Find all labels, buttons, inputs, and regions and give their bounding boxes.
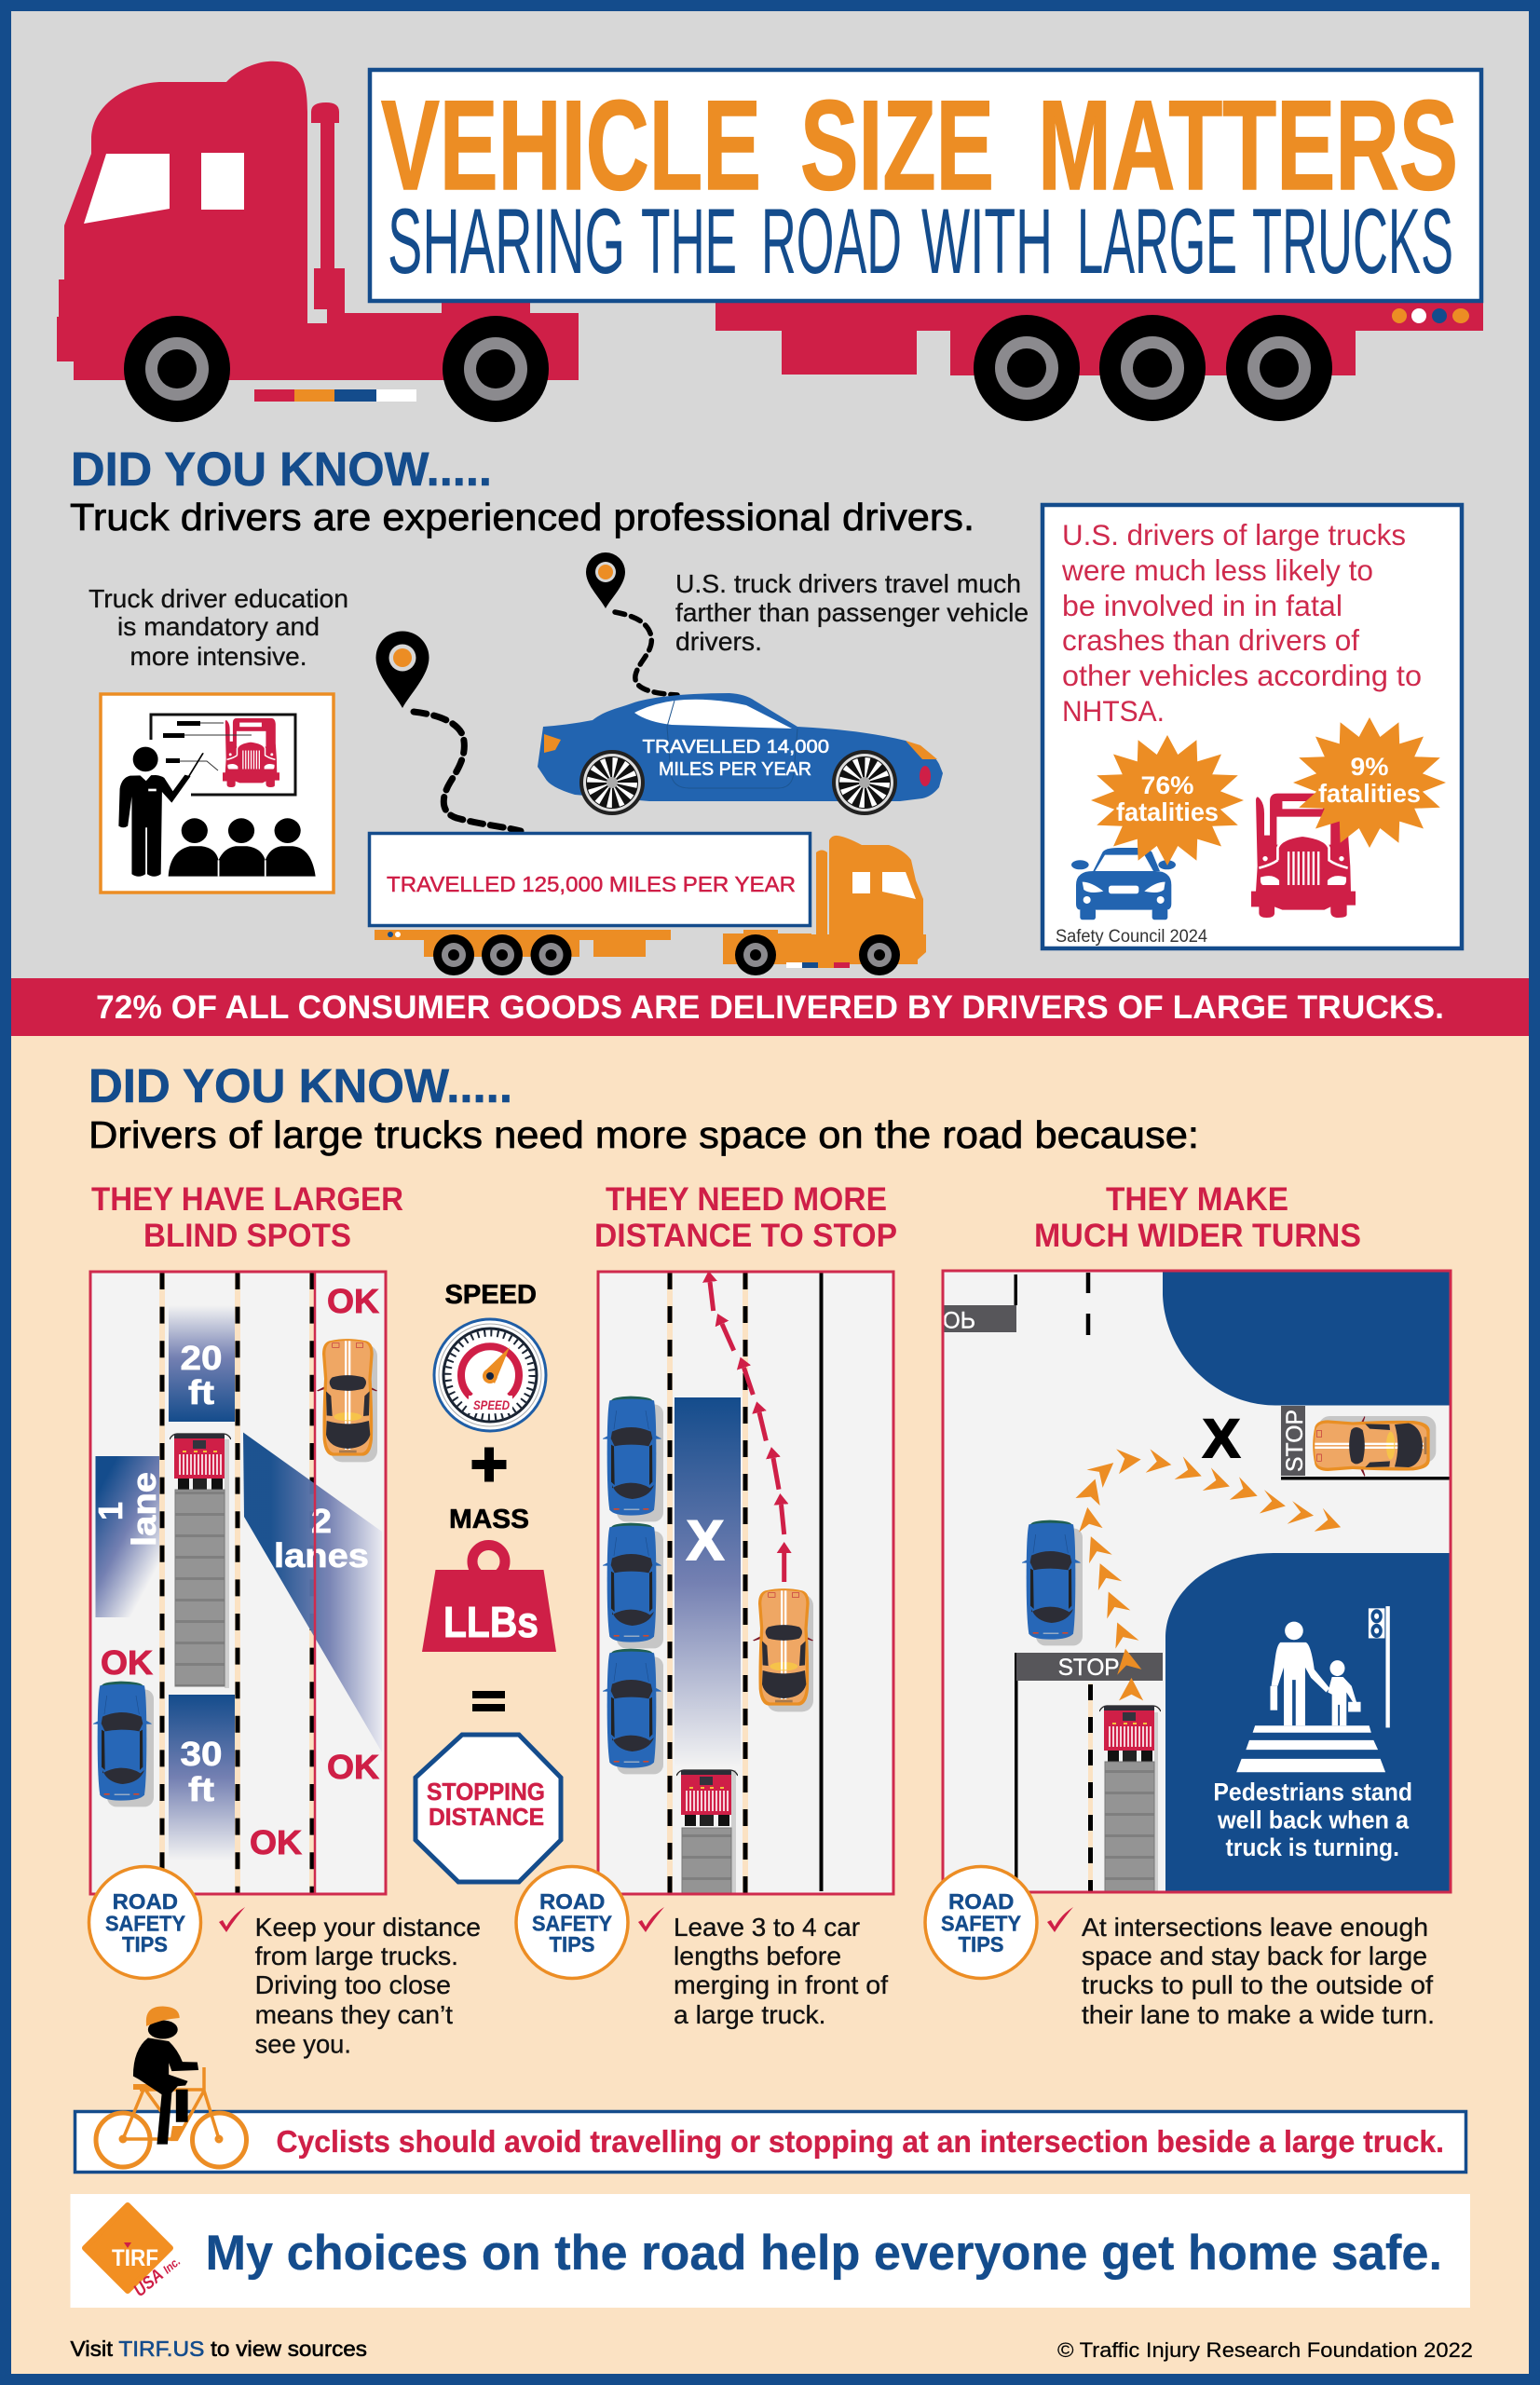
wheels: [124, 315, 1332, 422]
heading: stopping distance: [594, 1181, 897, 1254]
block: bottom right: [1165, 1553, 1451, 1892]
bottom centre dashes: [1088, 1683, 1093, 1892]
text: fatal crash statement: were much less likely to: [1061, 553, 1373, 587]
top left lane and flipped stop bar: STOP: [914, 1306, 975, 1332]
lane markings: [670, 1272, 822, 1894]
blind spot: rear 30 ft: 30: [181, 1735, 222, 1773]
orange car: [753, 1588, 813, 1711]
icon: location pin and route to truck: [376, 631, 521, 831]
icon: red truck front: [1251, 794, 1356, 918]
blind spot: rear 30 ft: ft: [188, 1770, 214, 1808]
car mileage label: [643, 736, 829, 780]
bottom left lane and stop bar: STOP: [1058, 1655, 1120, 1681]
source note: Safety Council 2024: [1056, 927, 1207, 947]
text: fatal crash statement: crashes than drivers of: [1062, 623, 1359, 657]
blind spot: front 20 ft: 20: [181, 1339, 222, 1377]
starburst: 9 percent: fatalities: [1318, 779, 1421, 808]
speed plus mass equation: [416, 1280, 561, 1882]
check mark 3: [1047, 1907, 1073, 1932]
starburst: 76 percent: [1091, 735, 1244, 865]
equals sign: [472, 1691, 505, 1711]
orange trailer chassis: [375, 930, 671, 957]
tip text 1: from large trucks.: [255, 1942, 458, 1970]
panel: stopping distance road diagram: [598, 1272, 893, 1894]
X no-go mark: X: [1203, 1409, 1240, 1469]
label: speed: SPEED: [445, 1280, 537, 1310]
tip text 1: Keep your distance: [255, 1913, 481, 1942]
footer: sources: Visit TIRF.US to view sources: [71, 2337, 367, 2361]
merging path arrows: [710, 1282, 784, 1582]
background: beige lower section: [0, 978, 1540, 2385]
text: driver education: more intensive.: [130, 642, 307, 671]
subheading: experienced professional drivers: Truck drivers are experienced professional drivers.: [70, 496, 974, 538]
tip text 1: see you.: [255, 2029, 351, 2059]
subtitle: [388, 189, 1453, 293]
rider: [133, 2007, 198, 2145]
heading: blind spots: THEY HAVE LARGER: [91, 1181, 403, 1218]
top left lane and flipped stop bar: [914, 1274, 1017, 1332]
text: fatal crash statement: U.S. drivers of large trucks: [1062, 518, 1406, 552]
badge: road safety tips 3: [925, 1867, 1037, 1979]
heading: did you know 1: DID YOU KNOW.....: [71, 443, 492, 496]
icon: speedometer: SPEED: [473, 1397, 510, 1412]
starburst: 9 percent: 9%: [1351, 753, 1388, 781]
tip text 2: [674, 1913, 888, 2029]
badge: road safety tips 1: TIPS: [122, 1932, 168, 1956]
icon: weight: LLBs: [443, 1598, 538, 1646]
stopping zone: X: [687, 1509, 724, 1572]
illustration: orange truck with mileage: [369, 833, 926, 975]
icon: weight: [422, 1545, 556, 1652]
panel: blind spots road diagram: [90, 1272, 386, 1894]
blue car: [93, 1682, 154, 1806]
badge: road safety tips 3: SAFETY: [941, 1912, 1021, 1936]
text: fatal crash statement: [1061, 518, 1422, 728]
OK labels: OK: [101, 1643, 153, 1682]
text: truck drivers travel farther: drivers.: [675, 627, 762, 656]
red band: 72% OF ALL CONSUMER GOODS ARE DELIVERED BY DRIVERS OF LARGE TRUCKS.: [96, 989, 1444, 1026]
pedestrians at crossing: [1236, 1606, 1390, 1772]
board labels: [163, 721, 252, 770]
subtitle: LARGE: [1077, 189, 1237, 293]
blind spot: front 20 ft: ft: [188, 1373, 214, 1411]
tip text 3: space and stay back for large: [1082, 1942, 1427, 1970]
label: mass: MASS: [449, 1505, 529, 1534]
blind spot: right 2 lanes: [243, 1433, 382, 1752]
OK labels: [101, 1282, 379, 1861]
icon: speedometer: [434, 1319, 546, 1431]
cab window large: [84, 154, 170, 224]
text: fatal crash statement: be involved in in fatal: [1062, 589, 1342, 622]
turning path arrows: [1075, 1449, 1341, 1700]
text: truck drivers travel farther: U.S. truck drivers travel much: [675, 569, 1021, 598]
text: truck drivers travel farther: farther than passenger vehicle: [675, 598, 1029, 627]
right stop bar: [1281, 1406, 1450, 1479]
orange car: [1313, 1416, 1436, 1477]
truck top view: [676, 1770, 738, 1894]
cyclist callout box: [75, 2111, 1466, 2173]
orange car: [317, 1339, 377, 1462]
stop sign: DISTANCE: [429, 1803, 544, 1831]
illustration: red semi truck header: [57, 61, 1483, 422]
logo: TIRF diamond: USA Inc.: [130, 2251, 184, 2301]
tip text 3: At intersections leave enough: [1082, 1913, 1428, 1942]
heading: did you know 2: DID YOU KNOW.....: [89, 1059, 512, 1112]
starburst: 76 percent: fatalities: [1116, 797, 1219, 826]
colour strip: [254, 389, 416, 402]
car wheels: [579, 750, 897, 815]
heading: blind spots: BLIND SPOTS: [143, 1218, 351, 1254]
heading: stopping distance: DISTANCE TO STOP: [594, 1218, 897, 1254]
check mark 1: [219, 1907, 245, 1932]
cyclist callout box: Cyclists should avoid travelling or stopping at an intersection beside a large truck.: [276, 2124, 1444, 2159]
starburst: 9 percent: [1293, 717, 1446, 848]
title: [381, 75, 1458, 217]
badge: road safety tips 3: ROAD: [948, 1889, 1014, 1914]
orange truck strip and lights: [388, 932, 850, 968]
subheading: need more space: Drivers of large trucks need more space on the road because:: [89, 1113, 1199, 1156]
icon: blue car front: [1071, 848, 1176, 920]
subtitle: SHARING: [388, 189, 625, 293]
blind spot: left 1 lane: [91, 1456, 163, 1617]
title panel on trailer: [370, 70, 1481, 301]
logo: TIRF diamond: [85, 2205, 184, 2301]
tip text 2: merging in front of: [674, 1970, 888, 1999]
panel: wide turn intersection: [914, 1271, 1451, 1892]
OK labels: OK: [327, 1748, 379, 1786]
blind spot: left 1 lane: lane: [125, 1472, 163, 1547]
tip text 2: lengths before: [674, 1942, 841, 1970]
heading: wider turns: MUCH WIDER TURNS: [1034, 1218, 1361, 1254]
panel: NHTSA fatalities: [1043, 505, 1462, 948]
text: pedestrians stand back: well back when a: [1217, 1806, 1410, 1833]
icon: cyclist: [96, 2007, 246, 2167]
OK labels: OK: [250, 1823, 302, 1861]
subtitle: WITH: [921, 189, 1053, 293]
blind spot: rear 30 ft: [169, 1695, 235, 1860]
tip text 3: their lane to make a wide turn.: [1082, 2000, 1435, 2029]
orange truck wheels: [433, 934, 900, 975]
stop sign: STOPPING: [427, 1778, 545, 1806]
stop sign: [416, 1735, 561, 1882]
plus sign: [471, 1448, 507, 1481]
tip text 1: [255, 1913, 481, 2059]
heading: stopping distance: THEY NEED MORE: [606, 1181, 887, 1218]
badge: road safety tips 2: TIPS: [550, 1932, 594, 1956]
tip text 1: means they can’t: [255, 2000, 453, 2029]
bicycle: [96, 2067, 246, 2167]
text: pedestrians stand back: [1213, 1778, 1412, 1861]
truck top view: [170, 1434, 231, 1688]
bottom left lane and stop bar: [1015, 1653, 1163, 1892]
tip text 3: trucks to pull to the outside of: [1082, 1970, 1433, 1999]
title: VEHICLE: [381, 75, 761, 217]
white trailer box: [369, 833, 811, 926]
badge: road safety tips 3: TIPS: [958, 1932, 1004, 1956]
text: pedestrians stand back: Pedestrians stand: [1213, 1778, 1412, 1806]
heading: wider turns: THEY MAKE: [1106, 1181, 1288, 1218]
icon: board: [151, 715, 295, 795]
heading: wider turns: [1034, 1181, 1361, 1254]
car mileage label: MILES PER YEAR: [659, 758, 811, 780]
blue car: [1022, 1520, 1083, 1645]
icon: presenter and students: [118, 747, 316, 877]
blind spot: left 1 lane: 1: [91, 1502, 129, 1520]
blue cars: [603, 1397, 663, 1774]
icon: small truck on board: [223, 718, 279, 787]
banner: slogan: [71, 2194, 1470, 2308]
truck mileage label: TRAVELLED 125,000 MILES PER YEAR: [387, 872, 796, 896]
top centre dashes: [1086, 1273, 1090, 1335]
subtitle: ROAD: [761, 189, 902, 293]
text: fatal crash statement: NHTSA.: [1062, 694, 1165, 728]
lane markings: [162, 1272, 312, 1894]
tip text 2: a large truck.: [674, 2000, 825, 2029]
right stop bar: STOP: [1282, 1410, 1308, 1472]
red cab and tractor frame: [57, 61, 579, 380]
tip text 3: [1082, 1913, 1435, 2029]
orange cab windows: [852, 872, 916, 899]
tip text 1: Driving too close: [255, 1970, 451, 1999]
panel: classroom icon: [101, 694, 334, 893]
truck top view: [1099, 1706, 1161, 1892]
badge: road safety tips 1: SAFETY: [105, 1912, 185, 1936]
text: truck drivers travel farther: [675, 569, 1029, 656]
text: pedestrians stand back: truck is turning.: [1226, 1833, 1399, 1861]
cab window small: [201, 153, 244, 210]
icon: location pin and route to car: [586, 552, 677, 695]
text: driver education: [89, 584, 348, 671]
illustration: blue car with mileage: [538, 693, 943, 815]
slogan text: My choices on the road help everyone get home safe.: [205, 2226, 1442, 2281]
text: fatal crash statement: other vehicles according to: [1062, 659, 1422, 692]
starburst: 76 percent: 76%: [1140, 771, 1194, 799]
blind spot: right 2 lanes: lanes: [274, 1536, 369, 1574]
logo: TIRF diamond: TIRF: [112, 2245, 158, 2271]
tip text 2: Leave 3 to 4 car: [674, 1913, 860, 1942]
subtitle: THE: [641, 189, 737, 293]
blind spot: front 20 ft: [169, 1305, 235, 1422]
car mileage label: TRAVELLED 14,000: [643, 736, 829, 757]
heading: blind spots: [91, 1181, 403, 1254]
red trailer chassis: [715, 303, 1483, 375]
title: SIZE: [800, 75, 994, 217]
badge: road safety tips 1: ROAD: [113, 1889, 178, 1914]
blind spot: right 2 lanes: 2: [311, 1502, 332, 1540]
stopping zone: [675, 1397, 741, 1767]
block: top right: [1163, 1271, 1451, 1405]
OK labels: OK: [327, 1282, 379, 1320]
orange cab: [723, 836, 926, 964]
badge: road safety tips 2: SAFETY: [532, 1912, 612, 1936]
check mark 2: [638, 1907, 664, 1932]
red band: [0, 978, 1540, 1036]
text: driver education: is mandatory and: [117, 612, 320, 641]
text: driver education: Truck driver education: [89, 584, 348, 613]
badge: road safety tips 2: ROAD: [539, 1889, 605, 1914]
badge: road safety tips 2: [516, 1867, 628, 1979]
trailer lights: [1392, 308, 1469, 323]
footer: copyright: © Traffic Injury Research Foundation 2022: [1057, 2338, 1473, 2362]
background: grey top section: [0, 0, 1540, 978]
badge: road safety tips 1: [89, 1867, 201, 1979]
